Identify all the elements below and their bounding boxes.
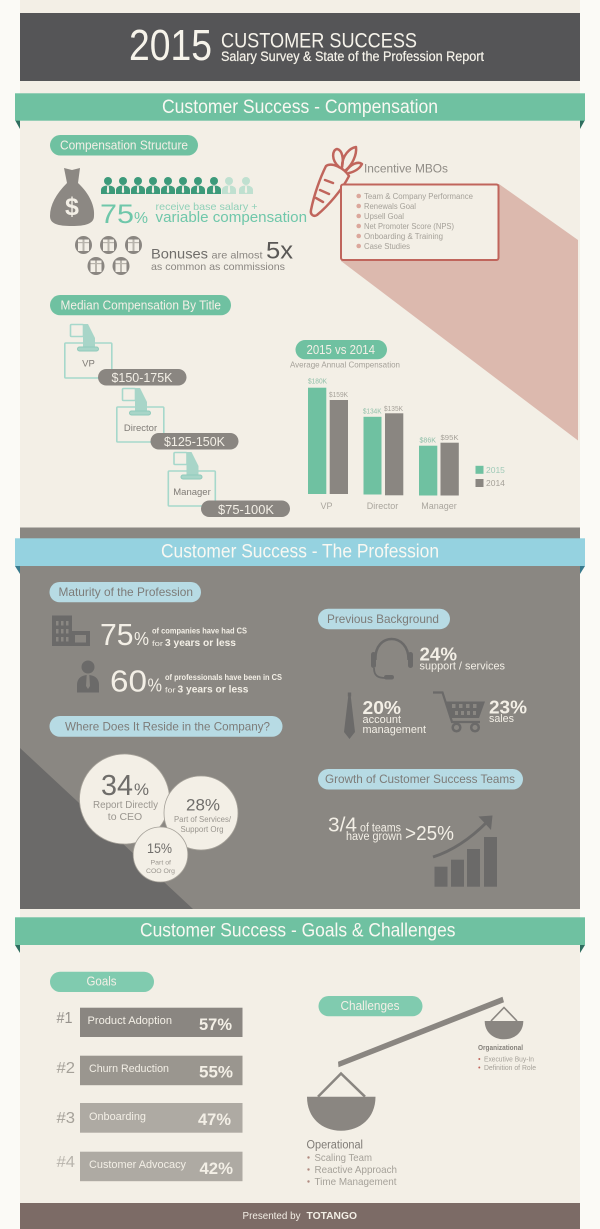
pill: previous background xyxy=(318,609,450,629)
stat: 75 percent variable compensation: 75 xyxy=(100,199,134,229)
text: organizational: Organizational xyxy=(478,1045,523,1052)
stat: 75 percent companies: of companies have had CS xyxy=(152,627,248,636)
stat: 60 percent professionals: 3 years or less xyxy=(178,684,249,696)
icon: money bag xyxy=(50,168,94,226)
stat: 75 percent variable compensation: % xyxy=(134,210,148,227)
goal 3: #3 xyxy=(56,1110,75,1127)
pill: goals xyxy=(50,972,154,992)
icon group: gifts xyxy=(75,236,142,275)
panel: MBO list: Renewals Goal xyxy=(364,202,416,211)
subtitle: Salary Survey & State of the Profession Report xyxy=(221,49,484,64)
stat: 24 percent support: 24% xyxy=(420,645,457,665)
text: operational: Reactive Approach xyxy=(314,1164,397,1176)
section banner: goals and challenges: Customer Success - Goals & Challenges xyxy=(140,921,456,942)
stat: 24 percent support: support / services xyxy=(420,660,505,672)
pill: growth: Growth of Customer Success Teams xyxy=(325,772,515,786)
stat: 23 percent sales xyxy=(489,697,527,725)
stat: 75 percent companies: % xyxy=(134,629,149,649)
footer: TOTANGO xyxy=(306,1211,357,1222)
stat: bonuses 5x: 5x xyxy=(266,238,293,264)
pill: maturity: Maturity of the Profession xyxy=(58,585,193,599)
goal 3 xyxy=(56,1103,242,1133)
pill: previous background: Previous Background xyxy=(327,612,439,626)
goal 1: Product Adoption xyxy=(88,1015,172,1027)
goal 3: 47% xyxy=(198,1110,231,1129)
stat: 75 percent companies xyxy=(100,617,248,652)
stat: 20 percent account management: 20% xyxy=(362,698,401,718)
stat: teams grown: of teams xyxy=(360,823,401,835)
pill: compensation structure xyxy=(50,135,198,156)
stat: bonuses 5x: as common as commissions xyxy=(151,261,285,273)
bubble: 28 percent services: Part of Services/ xyxy=(174,815,232,824)
stat: 60 percent professionals: % xyxy=(148,676,162,696)
stat: 75 percent companies: 75 xyxy=(100,617,134,652)
bubble: 34 percent CEO: % xyxy=(134,780,149,799)
pill: compensation structure: Compensation Structure xyxy=(60,138,188,152)
bubble: 34 percent CEO xyxy=(80,754,170,844)
pill: goals: Goals xyxy=(86,975,116,989)
goal 4: #4 xyxy=(56,1154,75,1171)
bubble: 28 percent services: Support Org xyxy=(180,825,224,834)
stat: 24 percent support xyxy=(420,645,505,672)
panel: MBO list: Team & Company Performance xyxy=(364,192,474,201)
icon: money bag: $ xyxy=(65,193,79,221)
goal 2: Churn Reduction xyxy=(89,1063,169,1075)
bar chart: compensation: Director xyxy=(367,501,398,511)
bar chart: compensation: Manager xyxy=(421,501,457,511)
stat: 20 percent account management: account xyxy=(362,714,401,726)
panel: MBO list xyxy=(341,184,498,260)
goal 4: 42% xyxy=(200,1159,233,1178)
pill: challenges: Challenges xyxy=(340,999,400,1013)
card: VP: VP xyxy=(82,358,95,370)
stat: teams grown: >25% xyxy=(405,823,454,845)
bubble: 15 percent COO: COO Org xyxy=(146,868,175,875)
stat: teams grown xyxy=(328,814,454,845)
bar chart: compensation: $180K xyxy=(308,377,327,386)
panel: MBO list: Case Studies xyxy=(364,242,410,251)
cream gap xyxy=(20,909,580,918)
goal 1: 57% xyxy=(199,1015,232,1034)
goal 4: Customer Advocacy xyxy=(89,1159,186,1171)
bubble: 28 percent services: 28% xyxy=(186,796,220,815)
stat: 60 percent professionals: for xyxy=(165,686,176,695)
chart legend: 2014 xyxy=(486,478,505,488)
text: operational: Time Management xyxy=(314,1176,397,1188)
goal 3: Onboarding xyxy=(89,1111,146,1123)
section banner: compensation: Customer Success - Compensation xyxy=(162,97,438,118)
bubble: 15 percent COO: 15% xyxy=(147,840,172,856)
goal 2: 55% xyxy=(199,1063,233,1082)
card: director: $125-150K xyxy=(164,434,225,449)
stat: 75 percent variable compensation: receive base salary + xyxy=(156,201,258,213)
goal 1: #1 xyxy=(56,1010,72,1027)
stat: 75 percent companies: 3 years or less xyxy=(165,637,236,649)
stat: 75 percent variable compensation: variable compensation xyxy=(156,209,307,226)
bubble: 34 percent CEO: Report Directly xyxy=(93,799,159,811)
stat: 20 percent account management xyxy=(362,698,426,736)
icon: necktie xyxy=(344,692,355,739)
text: organizational: Definition of Role xyxy=(484,1065,536,1072)
pill: maturity xyxy=(50,582,201,602)
card: VP: $150-175K xyxy=(112,370,173,385)
bubble: 15 percent COO: Part of xyxy=(150,859,171,866)
bar chart: compensation xyxy=(308,377,459,511)
bar chart: compensation: $159K xyxy=(329,390,348,399)
pill: median compensation xyxy=(50,295,231,315)
bar chart: compensation: $95K xyxy=(440,433,458,442)
text: organizational: Executive Buy-In xyxy=(484,1056,534,1063)
stat: 60 percent professionals xyxy=(110,664,283,699)
icon: scale xyxy=(307,997,523,1131)
card: manager xyxy=(168,452,290,517)
goal 2: #2 xyxy=(56,1060,75,1077)
stat: bonuses 5x xyxy=(151,238,293,273)
chart legend: 2015 xyxy=(486,465,505,475)
panel: profession background xyxy=(20,528,580,909)
goal 2 xyxy=(56,1056,242,1085)
text: operational: Scaling Team xyxy=(314,1152,372,1164)
goal 4 xyxy=(56,1152,242,1181)
footer xyxy=(20,1203,580,1229)
heading: incentive MBOs: Incentive MBOs xyxy=(364,164,448,176)
card: director: Director xyxy=(124,423,157,434)
pill: growth xyxy=(318,769,523,790)
section banner: goals and challenges xyxy=(15,917,585,953)
bar chart: compensation: VP xyxy=(320,501,333,511)
stat: 23 percent sales: 23% xyxy=(489,697,527,717)
pill: challenges xyxy=(318,996,422,1016)
icon: shopping cart xyxy=(433,692,485,731)
bubble: 34 percent CEO: to CEO xyxy=(108,811,142,823)
stat: teams grown: have grown xyxy=(346,831,402,843)
icon: headset xyxy=(371,639,413,680)
icon: professional person xyxy=(77,660,99,692)
bubble: 28 percent services xyxy=(164,776,238,850)
bar chart: compensation: $134K xyxy=(363,407,382,416)
section banner: profession: Customer Success - The Profession xyxy=(161,541,439,562)
stat: 20 percent account management: management xyxy=(362,724,426,736)
stat: 60 percent professionals: of professionals have been in CS xyxy=(165,673,283,682)
text: operational: Operational xyxy=(306,1140,363,1152)
header banner xyxy=(20,13,580,81)
year: 2015 xyxy=(129,21,212,70)
card: manager: $75-100K xyxy=(218,502,274,517)
icon: building xyxy=(52,616,90,646)
long shadow behind MBO box xyxy=(341,184,578,440)
bubble: 34 percent CEO: 34 xyxy=(101,770,133,802)
pill: 2015 vs 2014 xyxy=(296,340,387,359)
title: CUSTOMER SUCCESS xyxy=(221,30,417,52)
text: organizational xyxy=(478,1045,536,1072)
panel: MBO list: Onboarding & Training xyxy=(364,232,443,241)
pill: where does it reside xyxy=(50,716,282,737)
card: VP xyxy=(65,324,186,386)
icon row: people 75 percent xyxy=(101,177,253,194)
section banner: compensation xyxy=(15,93,585,129)
stat: teams grown: 3/4 xyxy=(328,814,357,836)
panel: MBO list: Upsell Goal xyxy=(364,212,404,221)
stat: 60 percent professionals: 60 xyxy=(110,664,147,699)
text: operational xyxy=(306,1140,397,1188)
section banner: profession xyxy=(15,538,585,574)
stat: 75 percent companies: for xyxy=(152,639,164,648)
pill: where does it reside: Where Does It Reside in the Company? xyxy=(65,720,270,734)
pill: median compensation: Median Compensation By Title xyxy=(60,298,221,312)
panel: MBO list: Net Promoter Score (NPS) xyxy=(364,222,454,231)
chart legend xyxy=(476,465,505,488)
footer: Presented by xyxy=(242,1211,300,1222)
stat: bonuses 5x: are almost xyxy=(212,250,263,262)
pill: 2015 vs 2014: 2015 vs 2014 xyxy=(306,342,375,357)
bar chart: compensation: $86K xyxy=(420,436,436,445)
bubble: 15 percent COO xyxy=(133,827,188,882)
card: director xyxy=(117,388,238,450)
stat: 23 percent sales: sales xyxy=(489,713,514,725)
goal 1 xyxy=(56,1008,242,1037)
icon: carrot xyxy=(311,147,362,216)
stat: 75 percent variable compensation xyxy=(100,199,307,229)
dark diagonal shadow xyxy=(20,748,193,909)
stat: bonuses 5x: Bonuses xyxy=(151,246,208,262)
chart subtitle: Average Annual Compensation xyxy=(290,359,400,369)
icon: growth bars with arrow xyxy=(433,816,497,887)
card: manager: Manager xyxy=(173,487,211,498)
bar chart: compensation: $135K xyxy=(384,404,403,413)
